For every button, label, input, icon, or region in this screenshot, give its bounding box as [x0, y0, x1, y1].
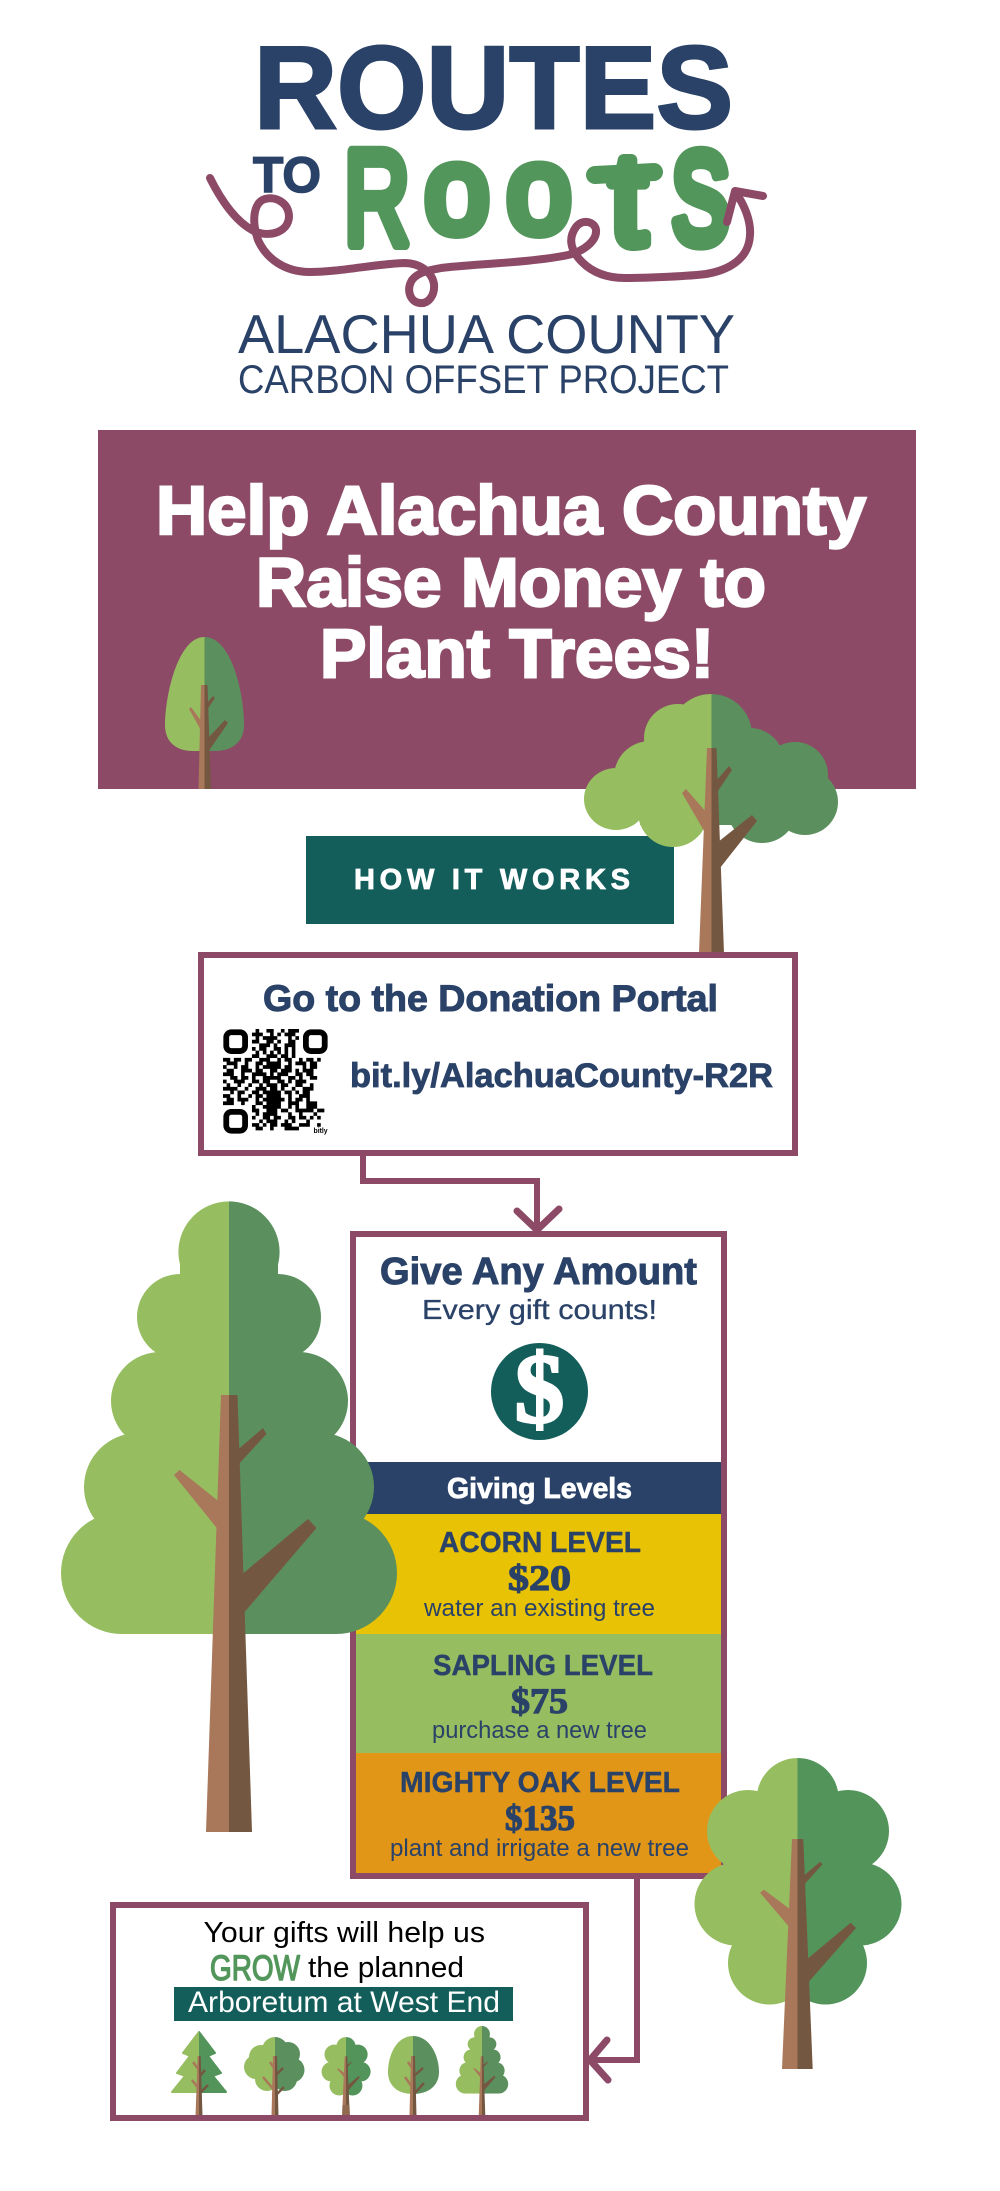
icon: mini round tree: [244, 2037, 304, 2116]
icon: large tree at left: [61, 1201, 397, 1832]
bitly mark: bitly: [313, 1128, 328, 1135]
band: mighty oak level: $135: [505, 1798, 575, 1838]
arboretum panel border: [113, 1905, 586, 2118]
arrow: portal to give any amount: [363, 1156, 559, 1230]
label: arboretum at west end: Arboretum at West End: [188, 1986, 500, 2019]
icon: mini tall tree: [456, 2026, 508, 2124]
panel: give any amount: [353, 1234, 724, 1876]
how it works heading: HOW IT WORKS: [354, 864, 630, 896]
band: acorn level: [356, 1514, 721, 1634]
band: mighty oak level: [356, 1753, 721, 1873]
logo word: TO: TO: [253, 147, 321, 203]
logo: Routes to Roots: [210, 22, 763, 402]
logo word: Roots: s: [672, 90, 730, 280]
logo t crossbar: [595, 172, 654, 175]
text: the planned: the planned: [308, 1952, 464, 1984]
logo word: Roots: R: [344, 124, 410, 273]
panel: headline banner: [98, 430, 916, 789]
logo word: Roots: t: [610, 126, 646, 272]
icon: mini lobed tree: [322, 2037, 371, 2111]
portal URL: bit.ly/AlachuaCounty-R2R: [350, 1057, 773, 1095]
band: sapling level: purchase a new tree: [432, 1717, 647, 1744]
headline text: Raise Money to: [256, 544, 766, 621]
icon: small tree in banner: [165, 637, 244, 789]
icon: mini pine tree: [172, 2032, 226, 2116]
band: acorn level: $20: [508, 1558, 571, 1598]
band: sapling level: SAPLING LEVEL: [433, 1650, 653, 1682]
logo subtitle: Alachua County: ALACHUA COUNTY: [238, 303, 735, 365]
logo swirl arrow: [210, 178, 763, 303]
arrow: levels to arboretum: [590, 1879, 637, 2080]
icon: tree at lower right: [694, 1758, 902, 2069]
subheading: every gift counts: Every gift counts!: [422, 1294, 657, 1325]
band: sapling level: $75: [511, 1681, 568, 1721]
band: sapling level: [356, 1634, 721, 1753]
word: GROW: GROW: [210, 1949, 300, 1988]
text: your gifts will help us: Your gifts will help us: [204, 1917, 485, 1949]
logo word: Roots: o: [425, 122, 489, 258]
band: acorn level: water an existing tree: [423, 1595, 655, 1622]
how it works heading: [306, 836, 674, 924]
icon: dollar coin: $: [514, 1333, 564, 1444]
headline text: [156, 472, 866, 692]
band: mighty oak level: plant and irrigate a new tree: [390, 1835, 689, 1862]
band: giving levels: [356, 1462, 721, 1514]
icon: mini trunk extension: [342, 2105, 350, 2116]
icon: dollar coin: [491, 1333, 588, 1444]
panel: go to the donation portal: [201, 955, 795, 1153]
band: giving levels: Giving Levels: [447, 1473, 632, 1505]
logo subtitle: Carbon Offset Project: CARBON OFFSET PROJECT: [238, 358, 729, 402]
icon: tree beside how it works: [584, 694, 838, 953]
QR code: [223, 1031, 328, 1135]
band: mighty oak level: MIGHTY OAK LEVEL: [400, 1767, 680, 1799]
logo word: ROUTES: ROUTES: [254, 22, 733, 153]
icon: mini egg tree: [388, 2036, 439, 2116]
panel: arboretum at west end: [113, 1905, 586, 2124]
portal heading: Go to the Donation Portal: [263, 978, 718, 1019]
headline text: Help Alachua County: [156, 472, 866, 549]
logo word: Roots: o: [507, 122, 571, 258]
heading: give any amount: Give Any Amount: [380, 1251, 697, 1293]
headline text: Plant Trees!: [320, 615, 714, 692]
band: acorn level: ACORN LEVEL: [439, 1527, 641, 1559]
